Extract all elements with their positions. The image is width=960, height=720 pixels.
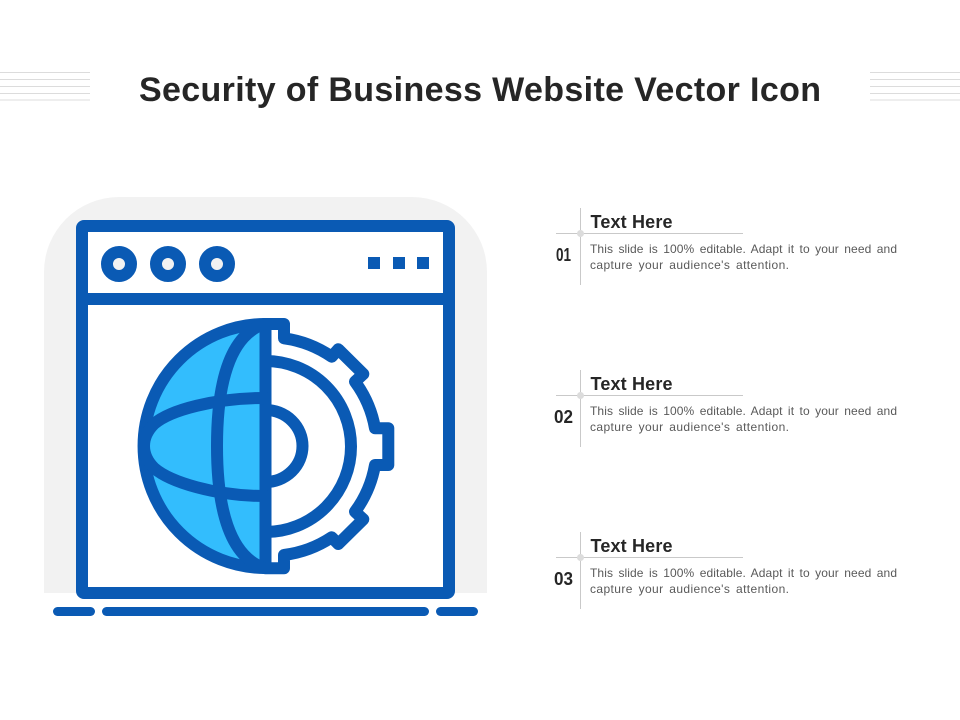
browser menu: three squares (368, 257, 429, 269)
list item 02: Text Here (590, 374, 672, 394)
list item 01: Text Here (590, 212, 672, 232)
icon: secure website illustration (44, 197, 487, 616)
icon: half gear (266, 324, 388, 568)
list item 03: Text Here (590, 536, 672, 556)
list item 03: capture your audience's attention. (590, 582, 789, 596)
title: Security of Business Website Vector Icon (139, 71, 821, 109)
icon: half globe (144, 324, 266, 568)
list item 03: 03 (554, 569, 573, 589)
browser window frame (82, 226, 449, 593)
left title decoration lines (0, 72, 90, 100)
list item 02: 02 (554, 407, 573, 427)
list item 02: This slide is 100% editable. Adapt it to your need and (590, 404, 897, 418)
icon background panel (44, 197, 487, 593)
browser buttons: three circles (107, 252, 229, 276)
list item 03: This slide is 100% editable. Adapt it to your need and (590, 566, 897, 580)
list item 01: 01 (556, 245, 571, 265)
list item 03 (554, 532, 897, 609)
right title decoration lines (870, 72, 960, 100)
list item 02: capture your audience's attention. (590, 420, 789, 434)
list item 02 (554, 370, 897, 447)
list item 01 (556, 208, 897, 285)
list item 01: capture your audience's attention. (590, 258, 789, 272)
base bars (53, 607, 478, 616)
list item 01: This slide is 100% editable. Adapt it to your need and (590, 242, 897, 256)
